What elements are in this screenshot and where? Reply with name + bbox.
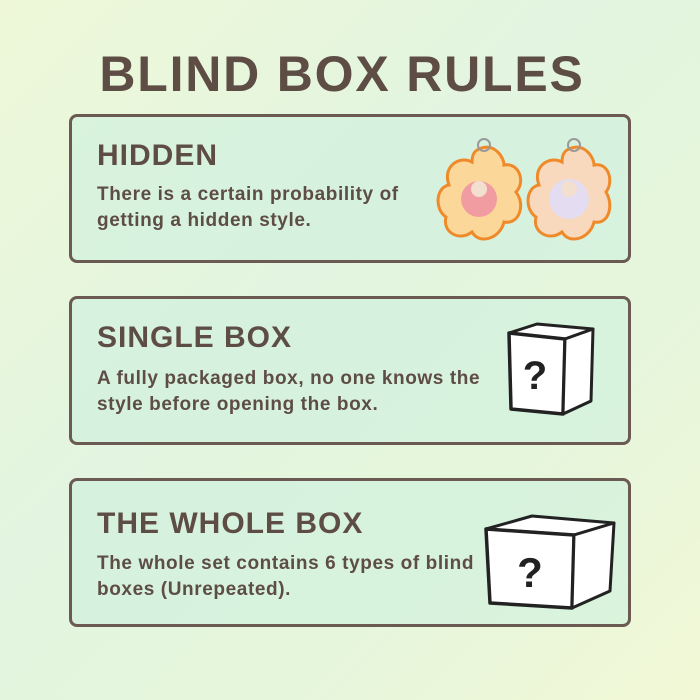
- text: whole box: [97, 553, 474, 600]
- text: single box: [97, 368, 480, 415]
- text: whole box: boxes (Unrepeated).: [97, 579, 291, 600]
- heading: hidden: HIDDEN: [97, 139, 218, 172]
- panel: whole box: [69, 478, 631, 627]
- panel: hidden: [69, 114, 631, 263]
- text: hidden: getting a hidden style.: [97, 210, 311, 231]
- icon: single box: [507, 322, 594, 416]
- text: whole box: The whole set contains 6 types of blind: [97, 553, 474, 574]
- text: single box: A fully packaged box, no one knows the: [97, 368, 480, 389]
- text: hidden: There is a certain probability of: [97, 184, 399, 205]
- icon: single box: ?: [523, 354, 547, 398]
- icon: whole box: ?: [517, 549, 543, 596]
- icon: two keychains: [436, 138, 612, 240]
- title: BLIND BOX RULES: [99, 46, 585, 102]
- panel: single box: [69, 296, 631, 445]
- heading: single box: SINGLE BOX: [97, 321, 292, 354]
- text: hidden: [97, 184, 399, 231]
- heading: whole box: THE WHOLE BOX: [97, 507, 363, 540]
- text: single box: style before opening the box.: [97, 394, 378, 415]
- icon: whole box: [484, 514, 616, 610]
